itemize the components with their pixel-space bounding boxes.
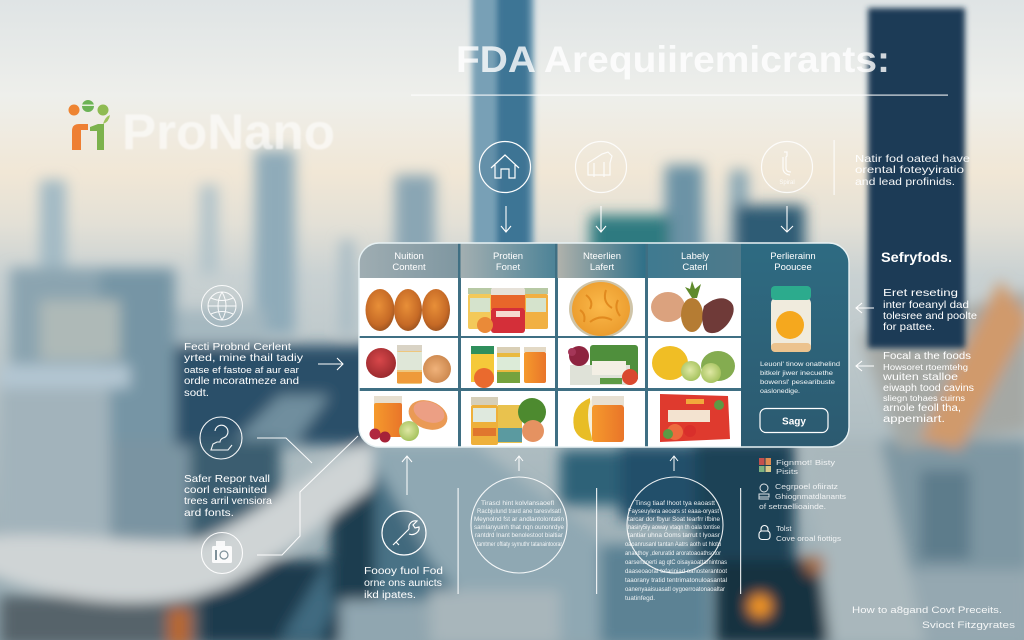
text block: safety report (184, 473, 272, 519)
food: egg, pineapple, pinecone fruit (651, 281, 734, 333)
column header: Nteerlien Lafert: Nteerlien (583, 251, 621, 262)
connector: camera to table (257, 436, 358, 555)
callout circle: text one: samlanyuinh that nqn ounonrdye (474, 524, 564, 531)
logo icon (68, 100, 110, 150)
legend item: lock: Cove oroal fiottigs (776, 534, 841, 543)
button (760, 408, 828, 432)
product description: bitkelr jiwer inecuethe (760, 370, 833, 377)
food: mango and juice (573, 396, 624, 442)
text block: protein content: ordle mcoratmeze and (184, 375, 299, 387)
callout circle: text two: hasiry5iy aoway vtaqn th oala tontise (628, 524, 720, 531)
legend item: colour blocks (759, 458, 835, 476)
product description (760, 361, 840, 395)
button: Sagy (782, 416, 806, 428)
legend item: lock: Tolst (776, 524, 792, 533)
legend item: contact (759, 482, 846, 511)
callout circle: text one: Tirascl hint kolvlansaoefl (481, 500, 555, 507)
column header: Protien Fonet: Protien (493, 251, 523, 262)
title rule (411, 94, 948, 96)
arrow: tool up (402, 456, 412, 495)
column header: Nution Content: Content (392, 262, 426, 273)
arrow: circle one up (515, 456, 523, 471)
text block: safety report: trees arril vensiora (184, 495, 272, 507)
food: vegetable package with berries (568, 345, 638, 385)
icon: person (200, 417, 242, 459)
column header: Nution Content (359, 243, 458, 278)
legend item: colour blocks: Fignmot! Bisty (776, 458, 835, 467)
text block: top right note (855, 153, 970, 188)
text block: safety note 1: Eret reseting (883, 287, 958, 299)
callout circle: text two: tantiar uhna Ooms tarrut t lyoasr (628, 532, 721, 539)
text block: protein content: sodt. (184, 387, 209, 399)
column header: Nteerlien Lafert: Lafert (590, 262, 615, 273)
product grid cells (359, 278, 741, 447)
legend item: contact: Ghiognmatdlanants (775, 492, 846, 501)
callout circle: text one: rantdrd Inant benolestoot bialtiar (475, 532, 564, 539)
food: red fruit, jar, melon (366, 345, 451, 384)
logo: ProNano (68, 100, 335, 160)
text block: safety report: coorl ensainited (184, 484, 267, 496)
legend item: contact: of setraellioainde. (759, 502, 826, 511)
food: three jars (468, 288, 548, 333)
text block: food note: Foooy fuol Fod (364, 566, 443, 577)
legend item: contact: Cegrpoel ofiiratz (775, 482, 838, 491)
text block: top right note: Natir fod oated have (855, 153, 970, 165)
footer text: Svioct Fitzgyrates (922, 620, 1015, 631)
callout circle: text two (625, 477, 728, 602)
text block: food note: ikd ipates. (364, 590, 416, 601)
column header: Labely Caterl: Caterl (682, 262, 708, 273)
callout circle: text one: Meynolnd fst ar andlantolontatin (474, 516, 564, 523)
food: jar, box, greens, orange (471, 397, 546, 445)
divider lines (458, 488, 741, 594)
text block: safety note 2: sliegn tohaes cuirns (883, 394, 965, 403)
callout circle: text two: daaseoaorat tofariniad oanosterantoot (625, 568, 727, 575)
callout circle: text two: oanenyaaisuasatl oygoerroatonaoaltar (625, 586, 726, 593)
divider by top note (834, 140, 835, 195)
text block: safety report: Safer Repor tvall (184, 473, 270, 485)
text block: safety note 1: tolesree and poolte (883, 310, 977, 322)
legend item: lock (759, 524, 841, 543)
icon: tool (382, 511, 426, 555)
product description: Leuonl' tinow onathelind (760, 361, 840, 368)
callout circle: text two: Tinsg tiaaf Ihoot tya eaoastt (635, 500, 715, 507)
callout circle: text two: anaethoy ,deruratid aroratoaoathsotor (625, 550, 722, 557)
callout circle: text two: taaorany tratid tentrimatonuloasantal (625, 577, 728, 584)
column header: Nteerlien Lafert (558, 243, 646, 278)
icon: globe (202, 286, 242, 326)
column header: Nution Content: Nuition (394, 251, 424, 262)
column 5 background (741, 243, 849, 447)
food: red package (660, 394, 730, 442)
column: Perlierainn Pooucee featured product (760, 251, 840, 432)
column heading: Perlierainn (770, 251, 816, 262)
text block: top right note: orental foteyyiratio (855, 164, 964, 176)
food: three jars, green and orange (471, 346, 546, 388)
text block: safety note 2: appemiart. (883, 414, 945, 425)
arrow: left to panel 1 (856, 303, 874, 313)
icon: food package (576, 142, 626, 192)
arrow: left to panel 2 (856, 361, 874, 371)
text block: safety note 1: for pattee. (883, 321, 935, 333)
callout circle: text two: oarsenaoerti ag qtC oisayaoattarnintnas (625, 559, 728, 566)
panel: comparison table (359, 243, 849, 447)
callout circle: text two: Fayseuylera aeoars st eaaa-oryast (628, 508, 719, 515)
text block: safety note 2 (882, 350, 974, 425)
text block: safety report: ard fonts. (184, 507, 234, 519)
icon: label bottle (762, 142, 812, 192)
footer text: How to a8gand Covt Preceits. (852, 605, 1002, 616)
connector: person (257, 438, 312, 463)
text block: safety note 2: Howsoret rtoemtehg (883, 362, 968, 372)
food: lemon and limes (652, 346, 735, 383)
panel background (359, 243, 849, 447)
column header: Protien Fonet: Fonet (496, 262, 521, 273)
food: juice, melon, berries, lime (370, 395, 452, 442)
text block: protein content: yrted, mine thail tadiy (184, 352, 304, 364)
wordmark: ProNano (122, 104, 335, 160)
column header: Protien Fonet (460, 243, 555, 278)
text block: safety note 1: inter foeanyl dad (883, 299, 969, 311)
arrow: circle two up (670, 456, 678, 471)
text block: safety note 2: eiwaph tood cavins (883, 383, 974, 394)
legend: bottom right (759, 458, 846, 543)
text block: protein content: Fecti Probnd Cerlent (184, 341, 291, 353)
legend item: colour blocks: Pisits (776, 467, 798, 476)
callout circle: text one: tamtmer oftiaty syrnuthr tatanaintoorar (477, 541, 563, 548)
text block: safety note 2: wuiten stalloe (882, 372, 959, 383)
icon: label bottle: Spiral (779, 180, 795, 186)
text block: protein content (184, 341, 304, 399)
column heading (770, 251, 816, 273)
food: three eggs (366, 289, 450, 331)
text block: safety note 1 (883, 287, 977, 333)
arrow: house down (501, 206, 511, 232)
title: FDA Arequiiremicrants: (456, 39, 890, 80)
column header: Labely Caterl: Labely (681, 251, 709, 262)
food: bowl of orange pieces (569, 280, 633, 338)
panel outline (359, 243, 849, 447)
product description: bowensl' pesearibuste (760, 379, 835, 386)
text block: top right note: and lead profinids. (855, 176, 955, 188)
callout circle: text two: oaoanrusanl tantan Aatrs aoth ut hlotu (625, 541, 721, 548)
heading: Sefryfods: Sefryfods. (881, 250, 952, 265)
footer text (852, 605, 1015, 631)
product jar (771, 286, 811, 352)
product description: oaslonedige. (760, 388, 800, 395)
text block: safety note 2: arnole feoll tha, (883, 403, 961, 414)
arrow: to table (318, 358, 343, 370)
column heading: Pooucee (774, 262, 812, 273)
text block: food note: orne ons aunicts (364, 578, 442, 589)
text block: food note (364, 566, 443, 601)
callout circle: text one: Racbjulund trard ane taresvlsatl (477, 508, 561, 515)
callout circle: text two: tarcar dor fbyur Soat tearfrr ifbine (628, 516, 720, 523)
column header: Labely Caterl (648, 243, 741, 278)
icon: house (480, 142, 530, 192)
text block: safety note 2: Focal a the foods (883, 350, 971, 362)
callout circle: text one (471, 477, 567, 573)
callout circle: text two: tuatinfegd. (625, 595, 655, 602)
arrow: bottle down (781, 206, 793, 232)
arrow: package down (596, 206, 606, 232)
text block: protein content: oatse ef fastoe af aur ear (184, 365, 299, 375)
icon: camera (202, 532, 242, 574)
